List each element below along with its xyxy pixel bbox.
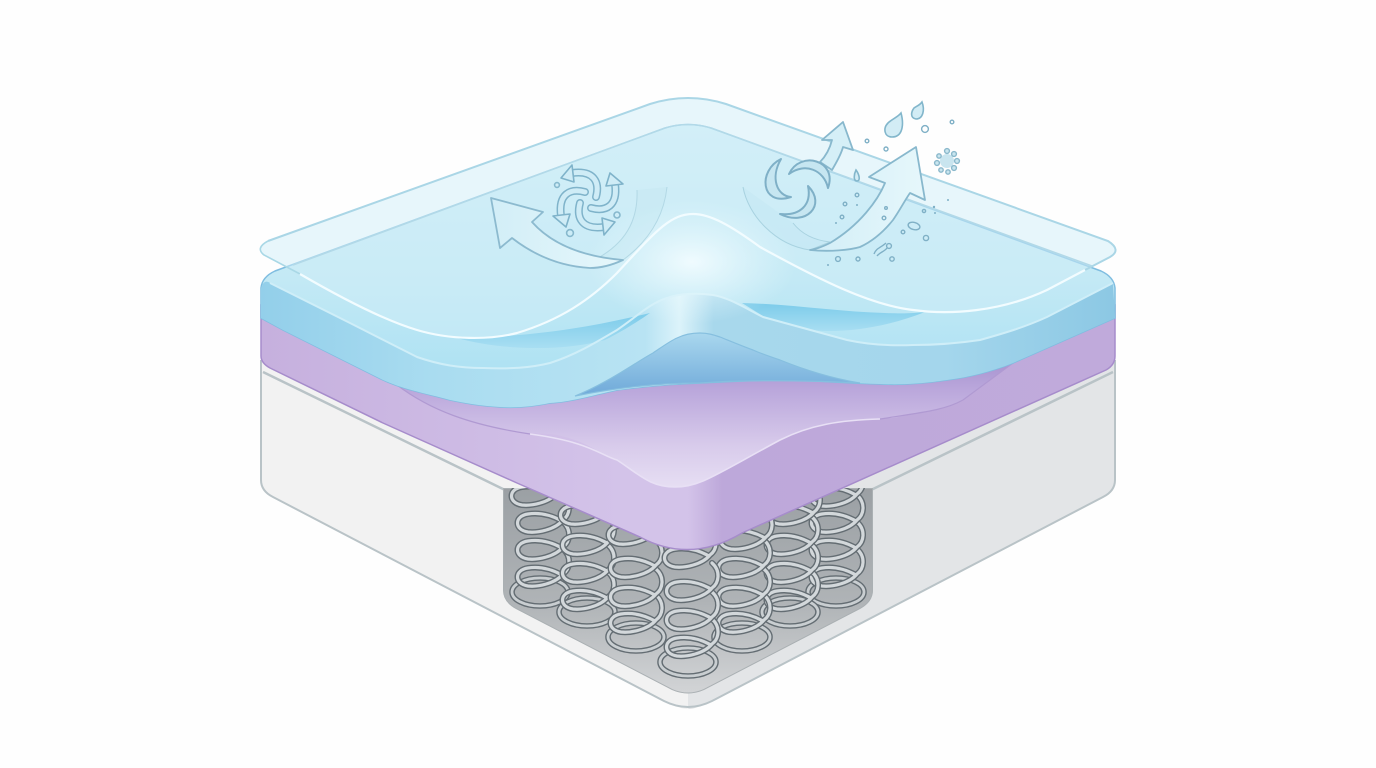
- base right face: [688, 360, 1115, 709]
- base outline: [261, 360, 1115, 707]
- purple foam top surface: [395, 350, 1013, 487]
- right swoosh trails: [743, 187, 830, 250]
- spring column 1: [512, 468, 569, 606]
- blue foam side band: [261, 282, 1115, 407]
- film sheet: [260, 98, 1116, 338]
- panel: coil spring window: [503, 468, 873, 694]
- spring column 5: [714, 512, 772, 651]
- blue foam silhouette: [261, 124, 1115, 407]
- left swoosh trails: [598, 187, 667, 260]
- film left tip edge: [260, 241, 300, 274]
- film front curve white highlight: [300, 214, 1085, 338]
- spring column 2: [559, 487, 615, 626]
- icon: right curved air arrow: [743, 147, 925, 251]
- spring column 7: [808, 469, 864, 606]
- spring column 6: [762, 487, 820, 626]
- icon: spiral vortex: [765, 159, 830, 218]
- left recessed band: [457, 313, 650, 348]
- layer: purple foam: [261, 300, 1115, 550]
- layer: white support base: [261, 360, 1115, 709]
- pinwheel particles: [555, 183, 620, 236]
- centre glow: [587, 200, 797, 324]
- icon: left curved air arrow: [491, 187, 667, 268]
- base left face: [261, 360, 688, 709]
- infographic: layered mattress: [260, 97, 1116, 709]
- spring column 3: [608, 507, 664, 651]
- blue foam highlight line: [270, 283, 1113, 368]
- right arrow shape: [810, 147, 925, 251]
- layer: transparent cover film: [260, 98, 1116, 338]
- window backdrop: [503, 488, 873, 694]
- purple foam crease lines: [397, 363, 1013, 434]
- inner back edge of foam through film: [293, 124, 1092, 266]
- icon: upper right small arrow: [820, 122, 853, 170]
- right recessed band: [742, 303, 925, 331]
- spring column 4: [660, 530, 718, 676]
- icon: virus particle: [935, 149, 959, 174]
- icon: water droplets: [854, 102, 923, 181]
- layer: blue foam: [261, 124, 1115, 407]
- icon: pinwheel of four arrows: [553, 165, 623, 236]
- blue foam underside shadow: [575, 333, 860, 396]
- left arrow shape: [491, 198, 623, 268]
- purple foam highlight line: [530, 419, 880, 487]
- base top rim lines: [263, 372, 1113, 490]
- purple foam silhouette: [261, 300, 1115, 550]
- icon: scattered moisture particles: [827, 120, 954, 266]
- film outer edge: [268, 98, 1116, 270]
